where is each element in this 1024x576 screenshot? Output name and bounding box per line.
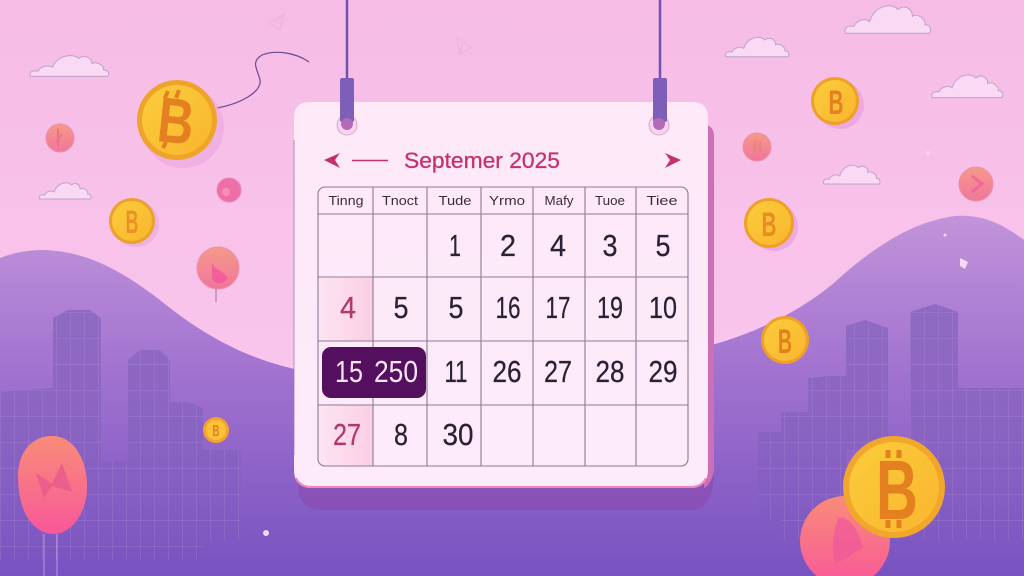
city skyline left [0, 310, 241, 560]
weekday headers [328, 193, 678, 208]
large bitcoin coin bottom right: B [876, 443, 918, 537]
coin mid right [761, 316, 809, 364]
next arrow [665, 153, 681, 168]
weekday headers: Tiee [646, 193, 678, 208]
date row 3: 28 [596, 354, 624, 389]
date row 4: 30 [442, 417, 474, 452]
weekday headers: Mafy [544, 193, 574, 208]
date row 3 [444, 354, 678, 389]
date row 3: 27 [544, 354, 572, 389]
date row 1: 3 [602, 228, 618, 263]
hanging strap left [337, 0, 357, 135]
coin top right: B [828, 84, 844, 122]
coin top right [811, 77, 864, 129]
coin right: B [762, 206, 776, 244]
highlighted date [322, 347, 426, 398]
date row 3: 11 [444, 354, 468, 389]
month header [324, 148, 681, 173]
large bitcoin coin top left [137, 80, 224, 168]
coin left [109, 198, 159, 247]
weekday headers: Tude [438, 193, 472, 208]
coin right [744, 198, 798, 251]
date row 4: 27 [333, 417, 361, 452]
small stars [263, 151, 968, 536]
date row 2: 5 [394, 290, 408, 325]
date row 2: 19 [597, 290, 623, 325]
pink balloon lower left [18, 436, 87, 576]
date row 4 [333, 417, 474, 452]
pink balloon small [197, 247, 239, 302]
date row 2: 16 [496, 290, 520, 325]
date row 1: 4 [550, 228, 566, 263]
pink circle lower right [800, 496, 890, 576]
date row 1: 2 [500, 228, 516, 263]
highlighted date: 15 [335, 354, 363, 389]
first column tint [319, 278, 373, 466]
coin left: B [126, 204, 138, 240]
date row 2 [340, 290, 677, 325]
weekday headers: Yrmo [489, 193, 525, 208]
city skyline right [758, 304, 1024, 540]
month title: Septemer 2025 [404, 148, 560, 173]
pink tokens [46, 124, 993, 202]
faint paper planes [269, 14, 471, 54]
hanging strap right [649, 0, 669, 135]
highlighted date: 250 [374, 354, 418, 389]
coin mid right: B [778, 323, 792, 361]
date row 2: 5 [448, 290, 464, 325]
calendar card shadow [298, 400, 714, 510]
date row 1: 5 [656, 228, 670, 263]
date row 3: 26 [492, 354, 522, 389]
clouds [30, 6, 1003, 199]
small coin lower left: B [212, 423, 220, 440]
purple hills [0, 216, 1024, 576]
date row 4: 8 [394, 417, 408, 452]
calendar body [294, 102, 708, 488]
date row 2: 17 [546, 290, 570, 325]
weekday headers: Tnoct [382, 193, 418, 208]
squiggle line from coin [217, 52, 309, 108]
large bitcoin coin top left: B [154, 83, 198, 159]
large bitcoin coin bottom right [843, 436, 945, 538]
date row 1 [449, 228, 670, 263]
weekday headers: Tinng [328, 193, 364, 208]
date row 2: 4 [340, 290, 356, 325]
date row 3: 29 [648, 354, 678, 389]
previous arrow [324, 153, 340, 168]
date row 1: 1 [449, 228, 461, 263]
weekday headers: Tuoe [595, 193, 625, 208]
small coin lower left [203, 417, 229, 443]
date row 2: 10 [649, 290, 677, 325]
calendar [294, 0, 708, 488]
calendar grid [318, 187, 688, 466]
